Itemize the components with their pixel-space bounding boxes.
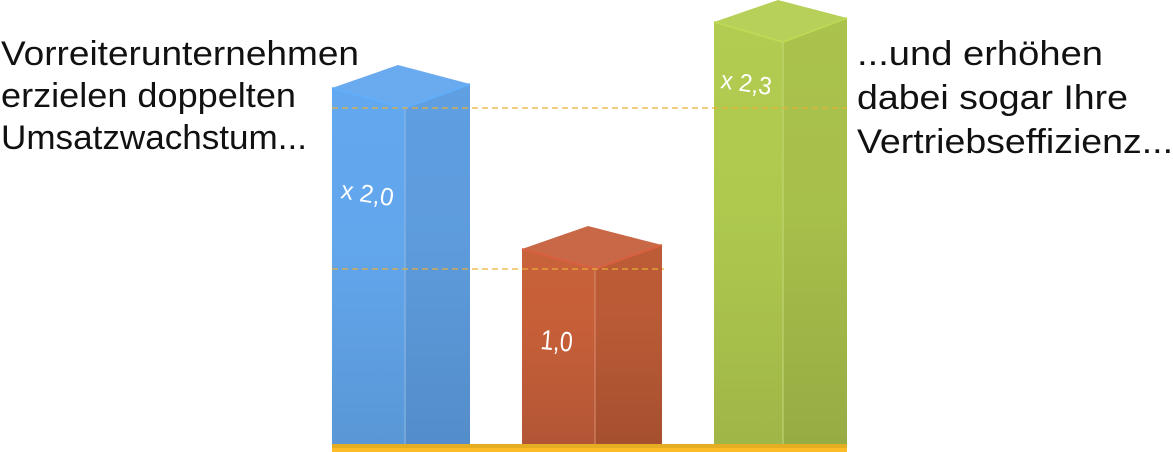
green bar: x 2,3 (714, 0, 847, 444)
reference line at 2,0 level (332, 107, 847, 109)
right text block (857, 35, 1173, 161)
label: x 2,0: x 2,0 (339, 176, 396, 212)
right text block: dabei sogar Ihre (857, 79, 1128, 117)
label: 1,0: 1,0 (539, 324, 574, 358)
right text block: ...und erhöhen (857, 35, 1103, 73)
right text block: Vertriebseffizienz... (857, 123, 1173, 161)
base bar (332, 444, 847, 452)
left text block: Vorreiterunternehmen (1, 35, 359, 73)
blue bar: x 2,0 (332, 65, 470, 444)
left text block (1, 35, 359, 157)
left text block: Umsatzwachstum... (1, 119, 307, 157)
left text block: erzielen doppelten (1, 77, 296, 115)
reference line at 1,0 level (332, 268, 664, 270)
label: x 2,3: x 2,3 (719, 66, 774, 101)
orange bar: 1,0 (522, 226, 662, 444)
